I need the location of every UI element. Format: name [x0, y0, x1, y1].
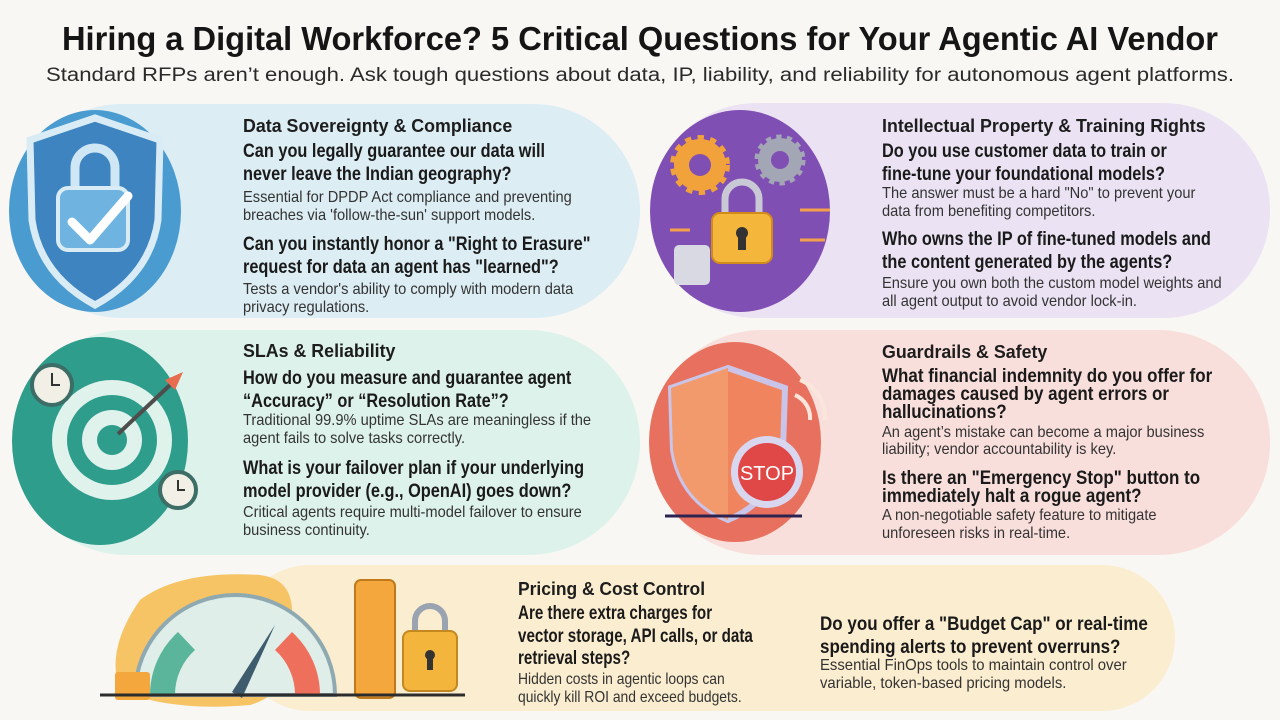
text: guardrails: damages caused by agent errors or	[882, 383, 1169, 404]
text: guardrails: liability; vendor accountability is key.	[882, 441, 1116, 458]
icon: shield with stop button	[649, 342, 825, 542]
text: data sovereignty: never leave the Indian geography?	[243, 163, 512, 184]
text: intellectual property: Who owns the IP of fine-tuned models and	[882, 228, 1211, 249]
text: intellectual property: fine-tune your foundational models?	[882, 163, 1165, 184]
text: SLAs: agent fails to solve tasks correctly.	[243, 430, 465, 447]
text: pricing left: Pricing & Cost Control	[518, 579, 705, 599]
icon: shield with lock	[9, 110, 181, 312]
text: guardrails: What financial indemnity do you offer for	[882, 365, 1212, 386]
title: Hiring a Digital Workforce? 5 Critical Questions for Your Agentic AI Vendor	[62, 20, 1218, 57]
text: pricing right: Essential FinOps tools to maintain control over	[820, 657, 1127, 674]
text: pricing left: retrieval steps?	[518, 646, 630, 668]
text: guardrails: An agent’s mistake can become a major business	[882, 424, 1204, 441]
panel: pricing	[100, 565, 1175, 711]
text: data sovereignty: Essential for DPDP Act compliance and preventing	[243, 189, 572, 206]
text: data sovereignty: Tests a vendor's ability to comply with modern data	[243, 281, 574, 298]
text: pricing left: vector storage, API calls, or data	[518, 624, 753, 646]
text: guardrails	[882, 342, 1212, 542]
text: SLAs: Traditional 99.9% uptime SLAs are meaningless if the	[243, 412, 591, 429]
text: data sovereignty	[243, 116, 590, 316]
text: data sovereignty: breaches via 'follow-the-sun' support models.	[243, 207, 535, 224]
text: intellectual property: the content generated by the agents?	[882, 251, 1172, 272]
text: guardrails: immediately halt a rogue agent?	[882, 485, 1142, 506]
text: SLAs: What is your failover plan if your underlying	[243, 457, 584, 478]
text: SLAs: business continuity.	[243, 522, 370, 539]
text: SLAs: “Accuracy” or “Resolution Rate”?	[243, 390, 509, 411]
text: pricing left: Hidden costs in agentic loops can	[518, 671, 725, 688]
text: SLAs	[243, 341, 591, 539]
text: data sovereignty: Can you instantly honor a "Right to Erasure"	[243, 233, 590, 254]
icon: shield with stop button: STOP	[740, 463, 794, 485]
icon: target with clocks	[12, 337, 196, 545]
text: guardrails: unforeseen risks in real-time.	[882, 525, 1070, 542]
text: pricing right	[820, 613, 1148, 692]
text: SLAs: model provider (e.g., OpenAI) goes down?	[243, 480, 571, 501]
text: guardrails: Guardrails & Safety	[882, 342, 1047, 362]
text: intellectual property: all agent output to avoid vendor lock-in.	[882, 293, 1137, 310]
text: guardrails: Is there an "Emergency Stop" button to	[882, 467, 1200, 488]
panel: intellectual property	[650, 103, 1270, 318]
text: data sovereignty: Can you legally guarantee our data will	[243, 140, 545, 161]
panel: SLAs	[12, 330, 640, 555]
text: pricing left	[518, 579, 753, 706]
panel: data sovereignty	[9, 104, 640, 318]
text: intellectual property	[882, 116, 1222, 310]
text: pricing left: Are there extra charges for	[518, 601, 712, 623]
icon: gauge with coins and lock	[100, 574, 465, 707]
text: pricing right: spending alerts to prevent overruns?	[820, 636, 1120, 657]
text: SLAs: How do you measure and guarantee agent	[243, 367, 571, 388]
text: intellectual property: Do you use customer data to train or	[882, 140, 1167, 161]
icon: gears and lock	[650, 110, 830, 312]
text: data sovereignty: privacy regulations.	[243, 299, 369, 316]
text: intellectual property: Intellectual Property & Training Rights	[882, 116, 1206, 136]
text: pricing right: variable, token-based pricing models.	[820, 675, 1066, 692]
text: data sovereignty: request for data an agent has "learned"?	[243, 256, 559, 277]
text: intellectual property: Ensure you own both the custom model weights and	[882, 275, 1222, 292]
text: pricing left: quickly kill ROI and exceed budgets.	[518, 689, 742, 706]
text: SLAs: Critical agents require multi-model failover to ensure	[243, 504, 582, 521]
panel: guardrails	[649, 330, 1270, 555]
text: SLAs: SLAs & Reliability	[243, 341, 395, 361]
subtitle: Standard RFPs aren’t enough. Ask tough questions about data, IP, liability, and reliability for autonomous agent platforms.	[46, 65, 1234, 86]
text: intellectual property: data from benefiting competitors.	[882, 203, 1095, 220]
text: guardrails: A non-negotiable safety feature to mitigate	[882, 507, 1157, 524]
text: data sovereignty: Data Sovereignty & Compliance	[243, 116, 512, 136]
text: pricing right: Do you offer a "Budget Cap" or real-time	[820, 613, 1148, 634]
text: guardrails: hallucinations?	[882, 401, 1007, 422]
text: intellectual property: The answer must be a hard "No" to prevent your	[882, 185, 1195, 202]
